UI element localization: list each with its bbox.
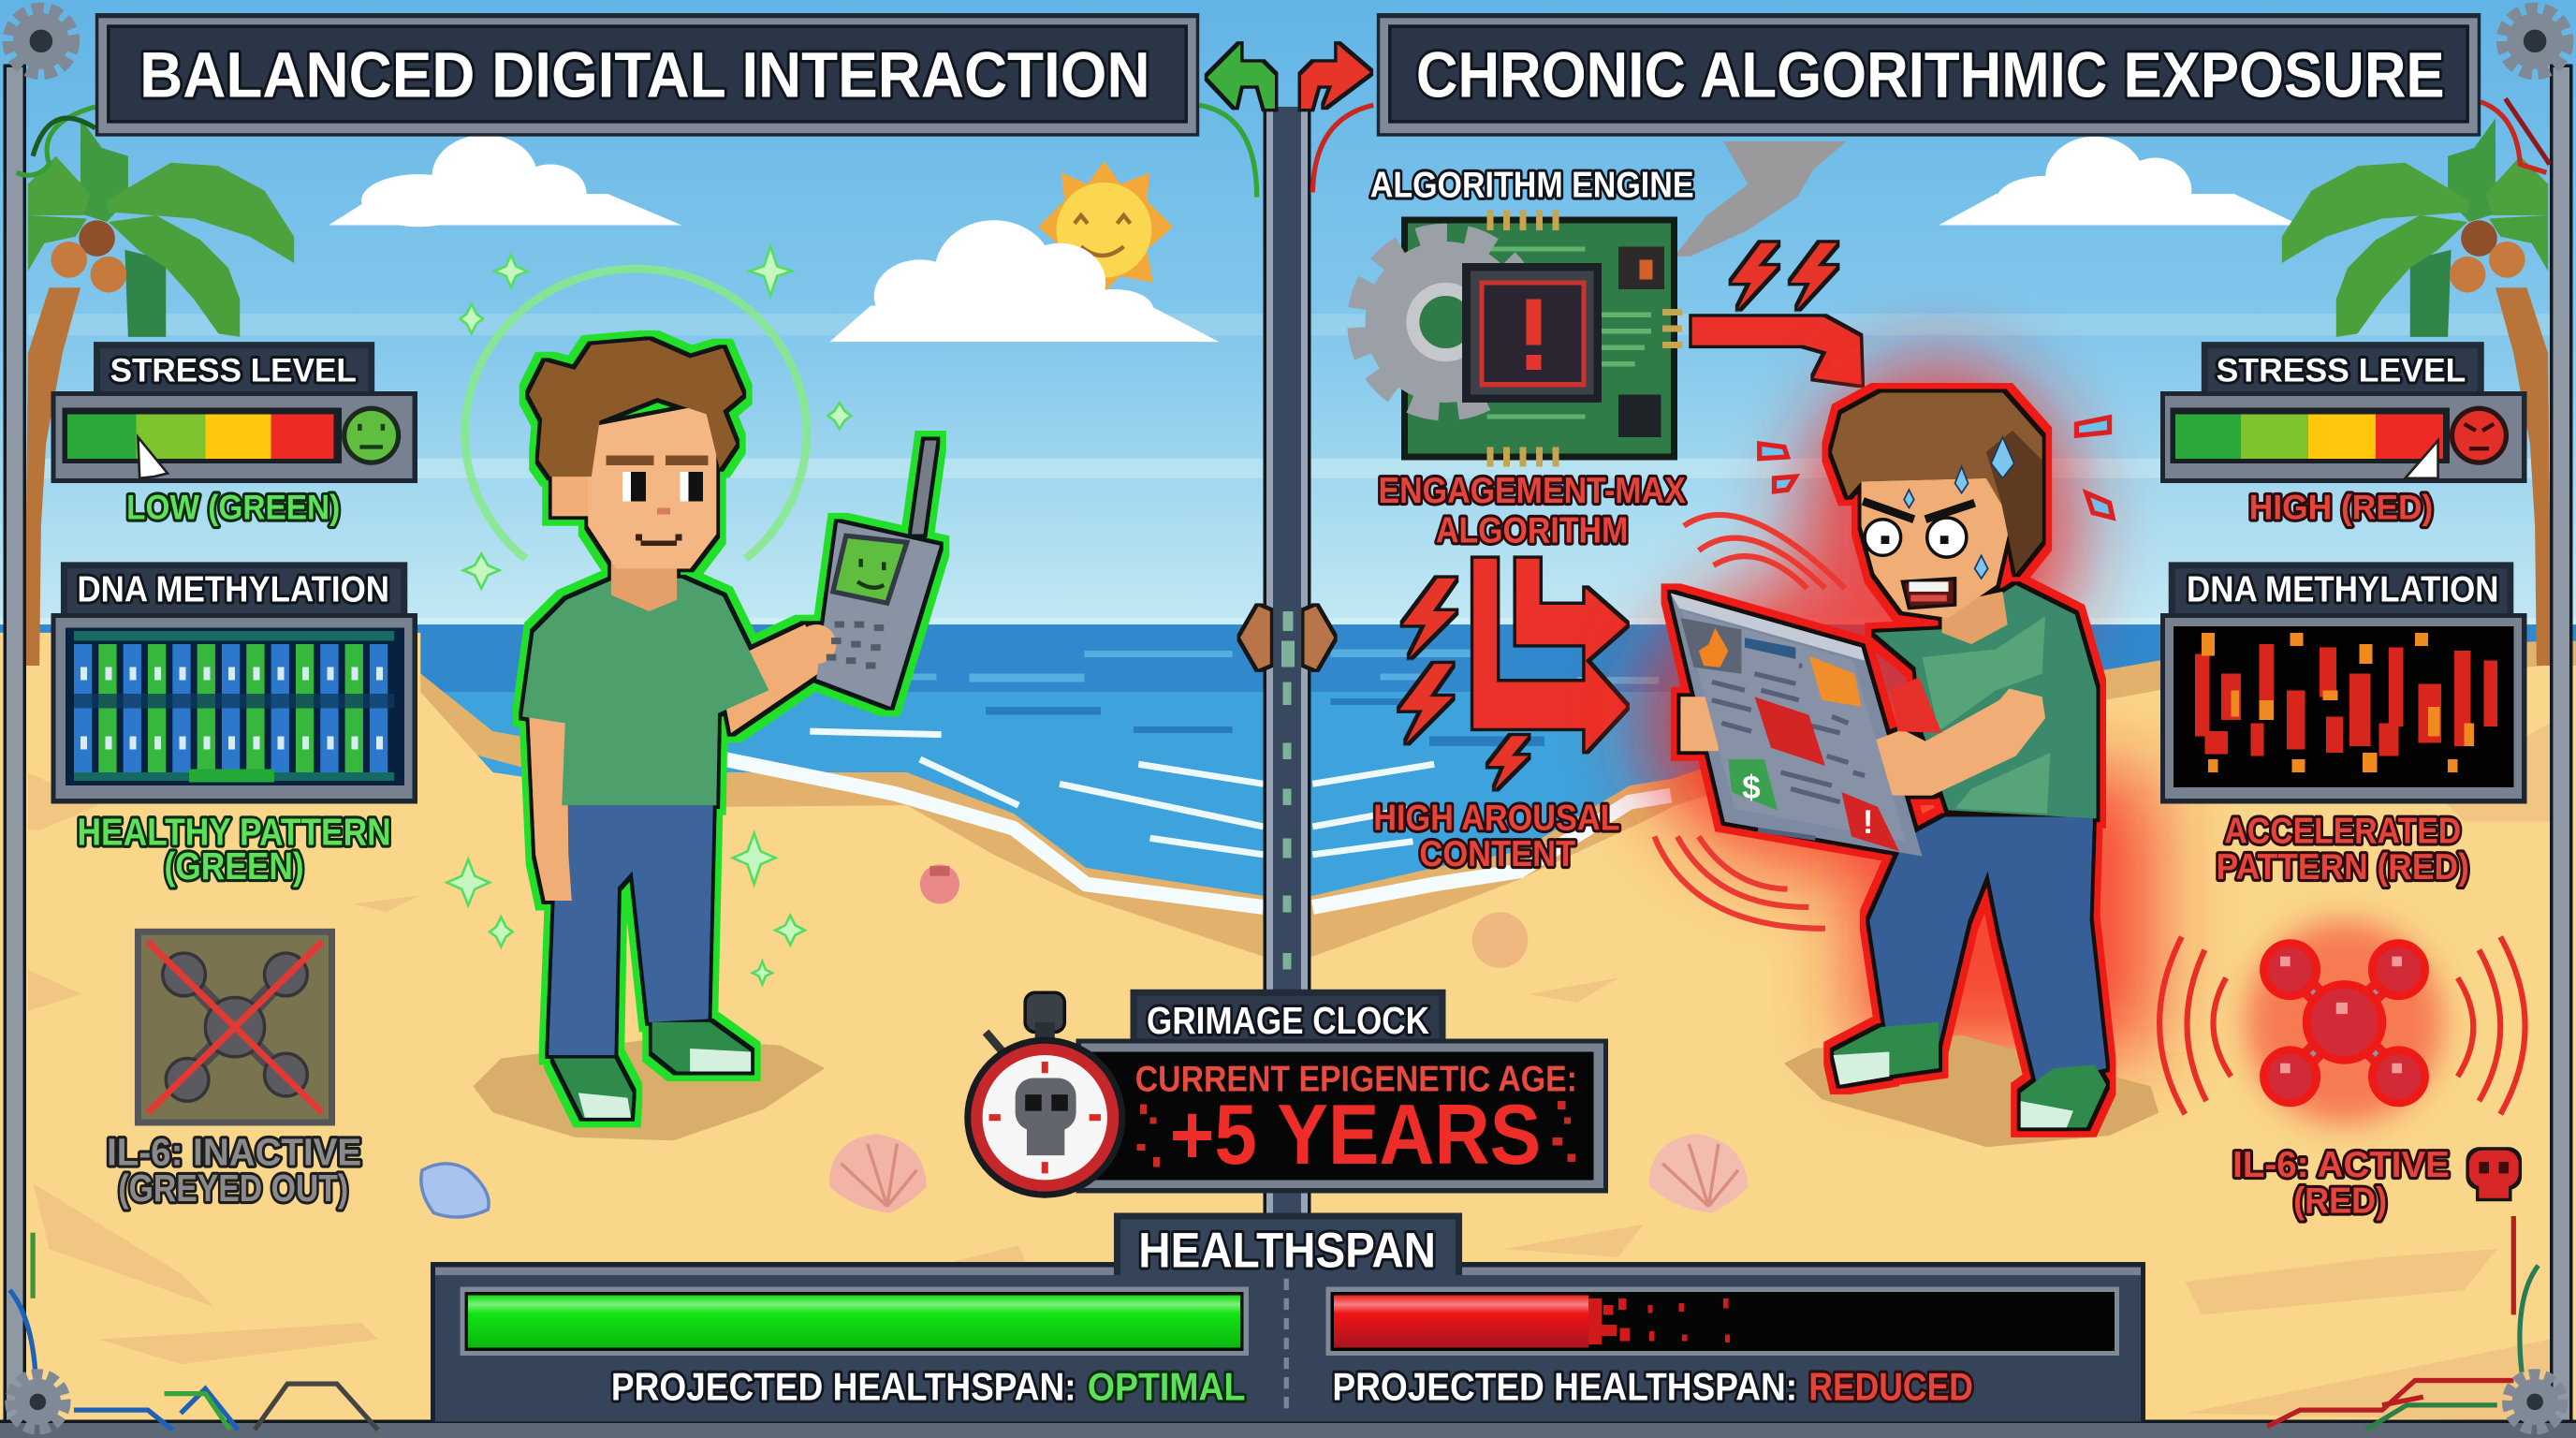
label: il-6 active: (RED) — [2293, 1181, 2387, 1222]
tag: STRESS LEVEL — [110, 352, 357, 389]
label: il-6 active: IL-6: ACTIVE — [2232, 1145, 2450, 1185]
tile: dollar: $ — [1742, 770, 1761, 806]
label: il-6 inactive: (GREYED OUT) — [118, 1167, 348, 1210]
label: healthy pattern — [77, 810, 391, 888]
foam waves — [810, 731, 1434, 855]
left hand — [1680, 697, 1719, 751]
sparks — [1137, 1101, 1575, 1167]
coconuts — [2450, 220, 2525, 292]
shells — [421, 864, 1748, 1217]
panel: stress level left — [51, 342, 417, 527]
legs — [549, 805, 713, 1055]
status: reduced: PROJECTED HEALTHSPAN: — [1332, 1365, 1797, 1409]
foam line — [724, 759, 1671, 907]
figure — [522, 340, 940, 1118]
figure — [1671, 393, 2106, 1127]
shell: pink right — [1649, 1134, 1748, 1213]
tablet — [1671, 594, 1922, 857]
flying sweat — [1760, 418, 2113, 518]
label: accelerated pattern: PATTERN (RED) — [2217, 847, 2469, 888]
tag: DNA METHYLATION — [77, 569, 389, 609]
chip — [1462, 263, 1602, 403]
phone — [816, 522, 940, 707]
label: high arousal content: CONTENT — [1419, 834, 1576, 874]
icons: lightning pair — [1732, 243, 1837, 309]
text: plus five years: +5 YEARS — [1170, 1087, 1541, 1182]
arrows: content feeds — [1473, 559, 1627, 751]
arrow: wooden left — [1240, 607, 1270, 668]
arrow: green top centre — [1208, 44, 1275, 109]
bar: optimal — [460, 1287, 1249, 1356]
fronds — [28, 118, 294, 337]
sparkles — [446, 246, 851, 985]
algorithm engine — [1362, 141, 1862, 874]
tile: dollar — [1728, 759, 1778, 810]
forearm — [718, 624, 829, 733]
cloud: top right — [1939, 137, 2300, 225]
trunk — [24, 287, 80, 666]
shell: blue — [421, 1164, 489, 1217]
tile: angry — [1808, 655, 1862, 707]
tag — [2169, 562, 2513, 618]
tile: headline — [1745, 638, 1795, 659]
icon: inactive molecule — [138, 932, 332, 1123]
gear — [1362, 239, 1530, 406]
wet sand band — [419, 641, 2576, 973]
tag: HEALTHSPAN — [1138, 1223, 1436, 1278]
label: high arousal content: HIGH AROUSAL — [1373, 798, 1620, 838]
hand — [797, 624, 836, 664]
left arm — [529, 710, 572, 901]
hair shade — [1986, 431, 2042, 574]
readout — [1076, 1038, 1608, 1193]
ear — [552, 474, 592, 516]
status: optimal: OPTIMAL — [1088, 1365, 1245, 1409]
palm tree left — [24, 118, 294, 666]
text: current epigenetic age: CURRENT EPIGENETIC AGE: — [1135, 1060, 1577, 1100]
panel: grimage clock — [964, 990, 1608, 1198]
tag: DNA METHYLATION — [2187, 569, 2499, 609]
person: chronic exposure — [1643, 361, 2159, 1147]
palm tree right — [2282, 118, 2552, 666]
header: balanced digital interaction: BALANCED DIGITAL INTERACTION — [139, 39, 1150, 111]
arm — [1855, 689, 2045, 796]
icon: happy face — [342, 406, 401, 465]
face — [588, 403, 716, 568]
icon: pointer — [2405, 440, 2438, 478]
tag — [2202, 342, 2484, 394]
circuit board — [1401, 211, 1682, 467]
face details — [1863, 501, 1975, 609]
gear: bottom left — [11, 1375, 64, 1428]
panel: il-6 active — [2159, 920, 2525, 1222]
tablet screen — [1671, 594, 1906, 851]
molecule glow — [2246, 920, 2443, 1124]
panel: dna methylation left — [51, 562, 417, 888]
hair — [529, 340, 742, 477]
shell: pink left — [829, 1134, 927, 1213]
gear: top right — [2504, 10, 2566, 72]
signal waves — [2159, 937, 2525, 1114]
arrow: engine to person — [1692, 317, 1862, 385]
ground shadow — [1784, 1035, 2159, 1147]
tile: warning — [1841, 792, 1899, 851]
dna pattern — [2160, 613, 2526, 803]
gauge — [51, 391, 417, 483]
label: il-6 inactive: IL-6: INACTIVE — [107, 1131, 361, 1174]
icon: active molecule — [2264, 944, 2425, 1103]
face details — [607, 455, 708, 546]
gauge — [2160, 391, 2526, 483]
shirt highlights — [1891, 616, 2050, 814]
icons: lightning column — [1399, 579, 1528, 789]
legs — [1869, 816, 2106, 1085]
shoes — [553, 1022, 751, 1118]
tag — [1131, 990, 1445, 1045]
divider — [1285, 1279, 1288, 1416]
header: chronic algorithmic exposure: CHRONIC ALGORITHMIC EXPOSURE — [1416, 39, 2445, 111]
panel body — [431, 1262, 2145, 1421]
sweat drops — [1904, 437, 2014, 579]
icon: stopwatch — [964, 992, 1125, 1198]
neck — [1942, 592, 2008, 644]
label: engagement-max algorithm — [1379, 471, 1686, 550]
label: il-6 inactive — [107, 1131, 361, 1210]
panel: il-6 inactive — [107, 932, 361, 1210]
arrow: red top centre — [1301, 44, 1370, 109]
ground shadow — [473, 1038, 825, 1140]
face — [1862, 478, 2012, 618]
header: chronic algorithmic exposure — [1377, 13, 2481, 137]
status: optimal: PROJECTED HEALTHSPAN: — [611, 1365, 1076, 1409]
icon: red skull — [2469, 1151, 2519, 1198]
red glow — [1643, 361, 2152, 1051]
tag: GRIMAGE CLOCK — [1147, 999, 1429, 1042]
shirt — [522, 579, 768, 805]
phone antenna — [912, 440, 936, 535]
status: reduced: REDUCED — [1808, 1365, 1973, 1409]
dna pattern — [51, 613, 417, 803]
header: balanced digital interaction — [95, 13, 1199, 137]
shirt — [1875, 585, 2097, 818]
tile: alert — [1754, 697, 1825, 766]
trunk — [2496, 287, 2552, 666]
label: high arousal content — [1373, 798, 1620, 874]
label: engagement-max algorithm: ALGORITHM — [1436, 510, 1628, 550]
halo — [465, 269, 807, 559]
hair — [1832, 393, 2042, 574]
label: engagement-max algorithm: ENGAGEMENT-MAX — [1379, 471, 1686, 511]
tile: fire — [1680, 618, 1741, 674]
panel: healthspan — [431, 1213, 2145, 1421]
shell: tan — [1472, 912, 1528, 968]
sea — [0, 622, 2576, 692]
label: accelerated pattern — [2217, 812, 2469, 888]
bar: reduced — [1325, 1287, 2119, 1356]
label: low green: LOW (GREEN) — [126, 489, 340, 527]
icon: pointer — [138, 437, 168, 478]
sand patches — [28, 723, 2550, 1421]
label: healthy pattern: (GREEN) — [165, 844, 304, 888]
person: balanced — [446, 246, 940, 1140]
shoes — [1834, 1022, 2106, 1127]
cloud: centre right — [829, 220, 1219, 342]
tag: STRESS LEVEL — [2217, 352, 2466, 389]
phone screen — [827, 536, 907, 668]
gear: bottom right — [2509, 1375, 2561, 1428]
centre pillar — [1264, 107, 1311, 1216]
label: healthy pattern: HEALTHY PATTERN — [77, 810, 391, 853]
coconuts — [51, 220, 126, 292]
label: il-6 active — [2232, 1145, 2450, 1222]
tag — [94, 342, 374, 394]
shell: small pink — [920, 864, 959, 903]
icon: sun — [1038, 161, 1173, 292]
neck — [611, 559, 677, 611]
label: high red: HIGH (RED) — [2249, 489, 2433, 527]
fronds — [2282, 118, 2548, 337]
label: accelerated pattern: ACCELERATED — [2224, 812, 2461, 852]
label: algorithm engine: ALGORITHM ENGINE — [1370, 166, 1694, 206]
stress waves — [1654, 515, 1845, 929]
gear: top left — [10, 10, 72, 72]
smoke — [1674, 141, 1847, 257]
sky — [0, 0, 2576, 624]
sand — [0, 649, 2576, 1438]
icon: angry face — [2450, 406, 2509, 465]
tag — [61, 562, 407, 618]
tile: warning: ! — [1863, 804, 1873, 841]
arrow: wooden right — [1305, 607, 1334, 668]
cloud: top left — [329, 135, 681, 227]
panel: dna methylation right — [2160, 562, 2526, 888]
panel: stress level right — [2160, 342, 2526, 527]
